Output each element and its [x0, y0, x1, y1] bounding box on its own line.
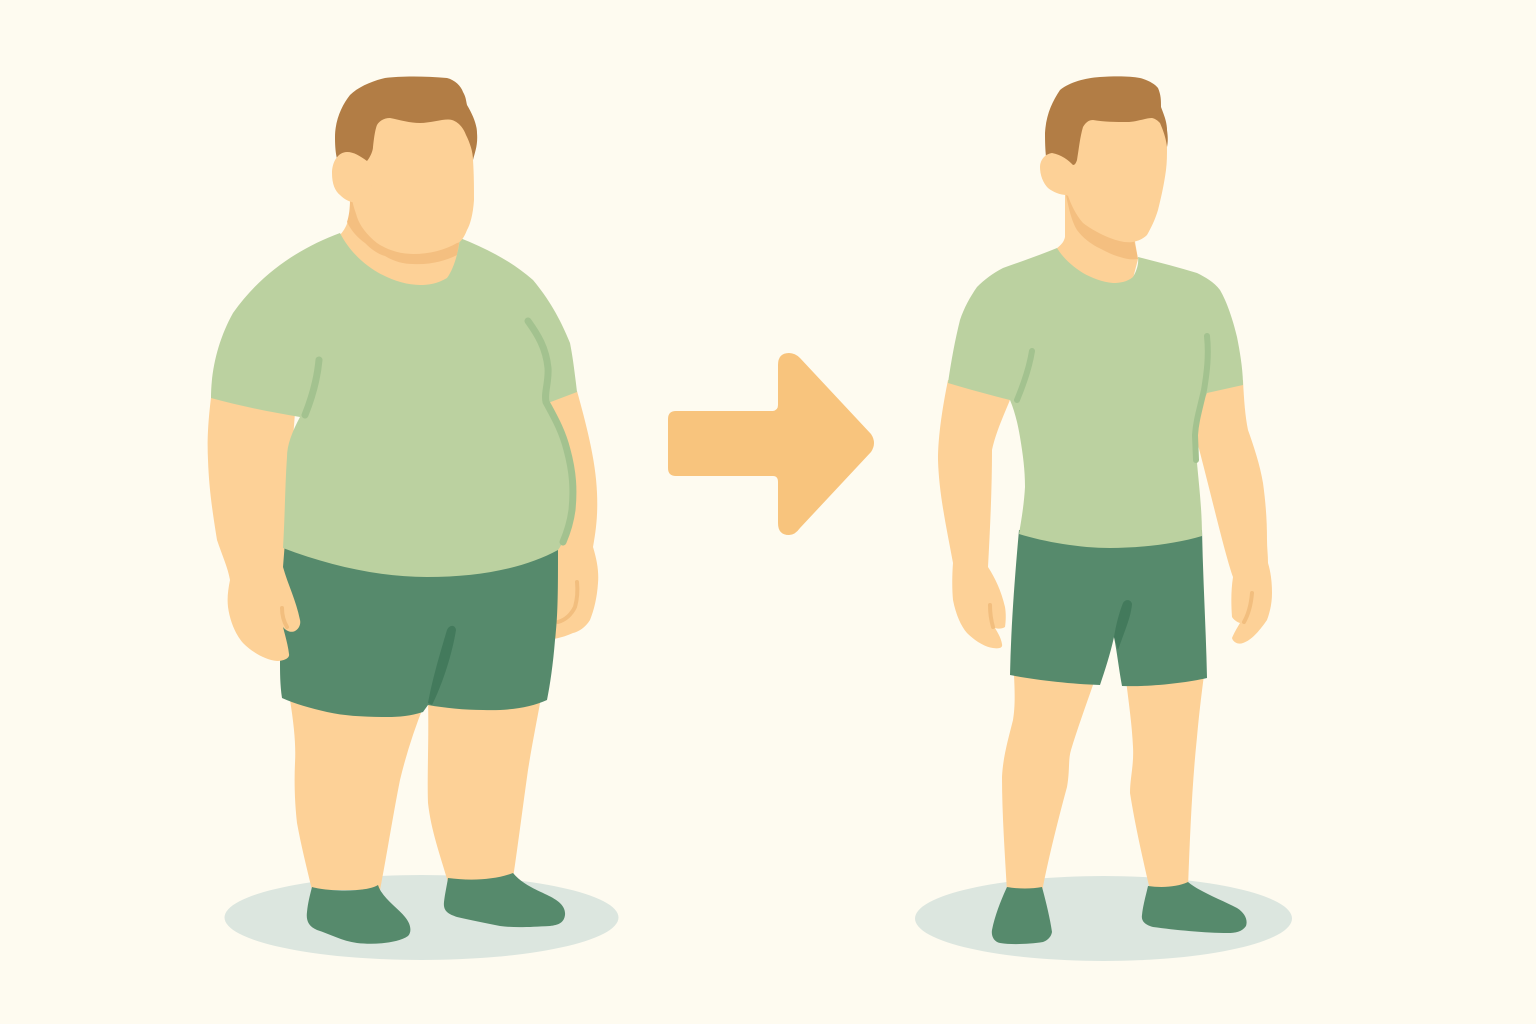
face: left figure: [352, 118, 474, 254]
shorts crease: [1114, 600, 1132, 650]
hair: left figure: [335, 76, 477, 190]
shirt fold: left: [1017, 351, 1032, 400]
hand crease: [282, 608, 287, 627]
neck shadow: right figure: [1066, 195, 1138, 259]
shorts: right figure: [1010, 530, 1207, 686]
face: right figure: [1067, 118, 1167, 242]
hair: right figure: [1045, 76, 1168, 180]
legs: right figure: [1002, 675, 1204, 892]
shirt fold: right: [528, 321, 573, 542]
shirt fold: left: [305, 360, 319, 415]
hand crease: [1244, 593, 1252, 622]
arm: left side of left figure: [208, 390, 300, 661]
hand crease: [990, 605, 993, 627]
ground shadow: right: [915, 876, 1292, 961]
neck: right figure: [1056, 190, 1138, 290]
socks: right figure: [992, 882, 1247, 944]
t-shirt: right figure: [948, 248, 1243, 548]
neck: left figure: [340, 190, 461, 295]
ground shadow: left: [224, 875, 618, 960]
shirt fold: right: [1195, 336, 1208, 460]
shorts crease: [428, 626, 456, 705]
arm: left side of right figure: [938, 380, 1012, 648]
ear: left figure: [332, 152, 372, 203]
shorts: left figure: [280, 548, 558, 717]
socks: left figure: [307, 873, 565, 944]
figure: overweight man (before): [208, 76, 618, 960]
t-shirt: left figure: [211, 233, 577, 577]
arrow: transformation direction: [668, 353, 874, 535]
ear: right figure: [1040, 153, 1080, 195]
arm: right side of left figure: [530, 391, 598, 639]
hand crease: [558, 582, 577, 622]
figure: slim man (after): [915, 76, 1292, 961]
legs: left figure: [290, 698, 541, 890]
arm: right side of right figure: [1195, 380, 1272, 644]
neck shadow: left figure: [347, 200, 460, 264]
